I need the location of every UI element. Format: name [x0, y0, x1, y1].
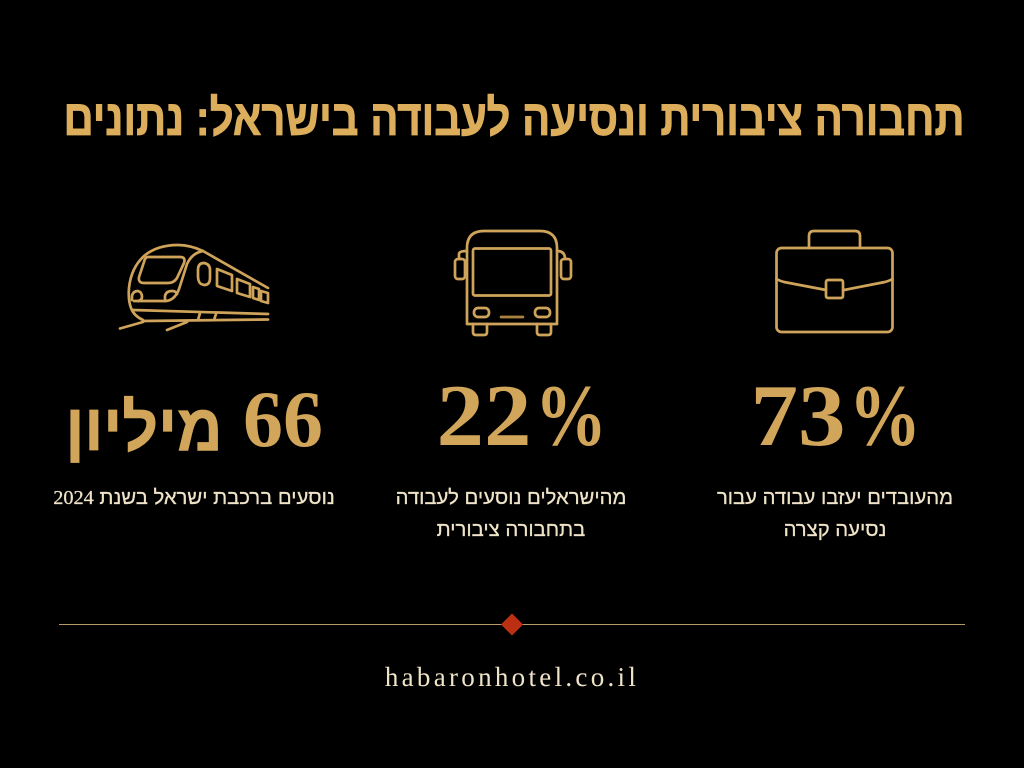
stat: 66 million: מיליון: [65, 390, 223, 464]
stat: 22 percent: %: [534, 368, 607, 465]
caption: would leave job for short commute: נסיעה קצרה: [784, 519, 886, 541]
caption: commute by public transport: בתחבורה ציבורית: [437, 519, 585, 541]
stat: 73 percent: %: [848, 368, 921, 465]
icon: briefcase: [775, 230, 894, 334]
caption: commute by public transport: מהישראלים נוסעים לעבודה: [396, 487, 626, 509]
icon: train: [118, 244, 270, 332]
stat: 73 percent: [750, 368, 921, 465]
caption: commute by public transport: [396, 487, 626, 541]
title: תחבורה ציבורית ונסיעה לעבודה בישראל: נתונים: [63, 90, 965, 146]
stat: 66 million: 66: [243, 376, 323, 464]
stat: 66 million: [65, 376, 323, 464]
stat: 73 percent: 73: [750, 368, 846, 465]
website: habaronhotel.co.il: [385, 662, 639, 692]
divider with diamond: [59, 614, 965, 636]
icon: bus: [454, 230, 572, 336]
caption: would leave job for short commute: [717, 487, 953, 541]
stat: 22 percent: [436, 368, 607, 465]
caption: would leave job for short commute: מהעובדים יעזבו עבודה עבור: [717, 487, 953, 509]
stat: 22 percent: 22: [436, 368, 532, 465]
caption: passengers on Israel trains: נוסעים ברכבת ישראל בשנת 2024: [53, 487, 335, 509]
